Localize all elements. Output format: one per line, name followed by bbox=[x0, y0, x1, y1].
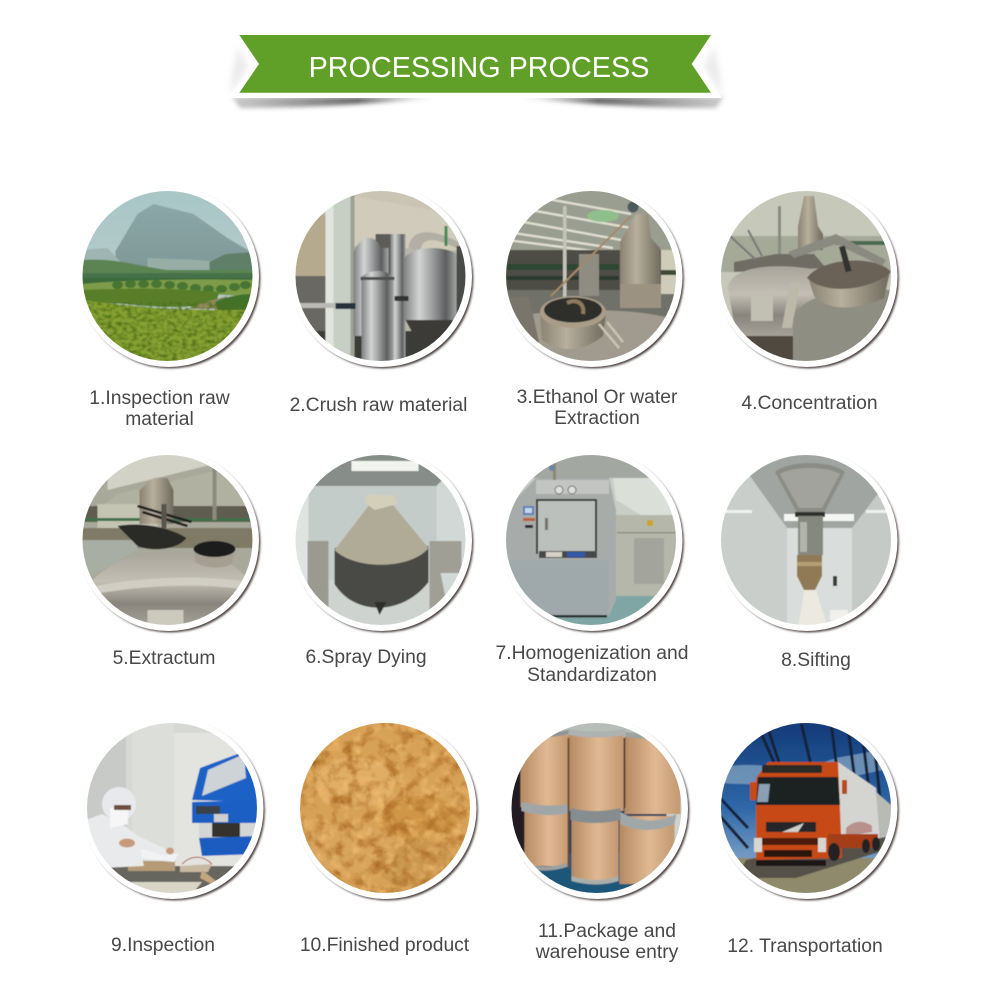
photo: open steel tank bbox=[82, 454, 254, 626]
label bbox=[89, 388, 230, 430]
label: 8.Sifting bbox=[781, 650, 851, 671]
label: material bbox=[125, 409, 194, 430]
step 11: package and warehouse entry bbox=[506, 718, 689, 963]
label bbox=[535, 921, 679, 963]
photo: fibre drums bbox=[506, 722, 682, 894]
label: 12. Transportation bbox=[727, 936, 883, 957]
photo: orange truck bbox=[720, 722, 892, 894]
label: 1.Inspection raw bbox=[89, 388, 230, 409]
label: 10.Finished product bbox=[300, 935, 470, 956]
label: 6.Spray Dying bbox=[305, 647, 427, 668]
photo: golden powder bbox=[299, 722, 471, 894]
step 3: ethanol or water extraction bbox=[502, 186, 684, 429]
step 4: concentration bbox=[716, 186, 899, 414]
title text: PROCESSING PROCESS bbox=[309, 52, 649, 84]
label: 11.Package and bbox=[538, 921, 676, 942]
label: 4.Concentration bbox=[741, 393, 878, 414]
step 1: inspection raw material bbox=[78, 186, 260, 430]
step 10: finished product bbox=[296, 718, 478, 956]
photo: worker at sealing machine bbox=[86, 722, 258, 894]
photo: sifting funnel bbox=[720, 450, 892, 626]
step 6: spray dying bbox=[291, 450, 473, 668]
step 12: transportation bbox=[716, 718, 899, 957]
step 9: inspection bbox=[82, 718, 265, 956]
label: 7.Homogenization and bbox=[496, 643, 688, 664]
photo: concentration vessels bbox=[720, 190, 892, 362]
step 8: sifting bbox=[716, 450, 899, 671]
photo: steel cabinet bbox=[505, 454, 677, 626]
label: 3.Ethanol Or water bbox=[517, 387, 678, 408]
photo: extraction tank bbox=[505, 190, 677, 362]
step 5: extractum bbox=[78, 450, 260, 669]
photo: tea plantation bbox=[82, 190, 254, 362]
title banner bbox=[227, 35, 724, 108]
label: warehouse entry bbox=[535, 942, 679, 963]
label: 2.Crush raw material bbox=[290, 395, 467, 416]
photo: double cone dryer bbox=[294, 454, 466, 626]
label bbox=[496, 643, 688, 686]
step 7: homogenization and standardization bbox=[496, 450, 688, 686]
step 2: crush raw material bbox=[290, 186, 473, 416]
label: Standardizaton bbox=[527, 665, 657, 686]
label: 5.Extractum bbox=[113, 648, 215, 669]
photo: evaporator tanks bbox=[294, 190, 466, 362]
label bbox=[517, 387, 678, 429]
label: 9.Inspection bbox=[111, 935, 215, 956]
label: Extraction bbox=[554, 408, 640, 429]
